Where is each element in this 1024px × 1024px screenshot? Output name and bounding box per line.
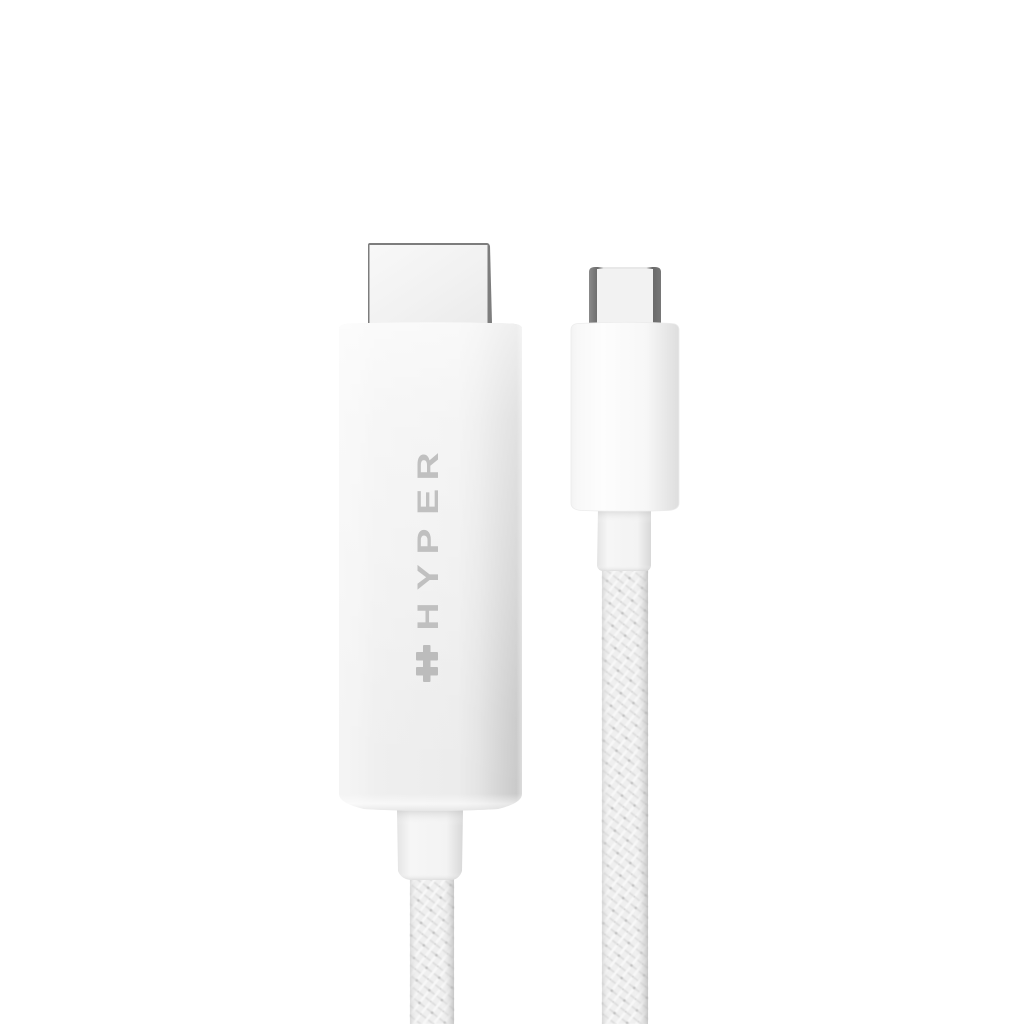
HDMI plug <box>368 243 492 323</box>
braided cable: HDMI side <box>410 878 454 1024</box>
HDMI connector housing <box>339 322 522 811</box>
USB-C plug <box>589 267 661 323</box>
USB-C connector housing <box>571 322 679 511</box>
HYPER wordmark: HYPER <box>412 452 445 631</box>
strain relief: HDMI side <box>397 810 463 880</box>
icon: HYPER logo mark <box>416 645 438 682</box>
strain relief: USB-C side <box>597 510 651 571</box>
braided cable: USB-C side <box>602 569 648 1024</box>
